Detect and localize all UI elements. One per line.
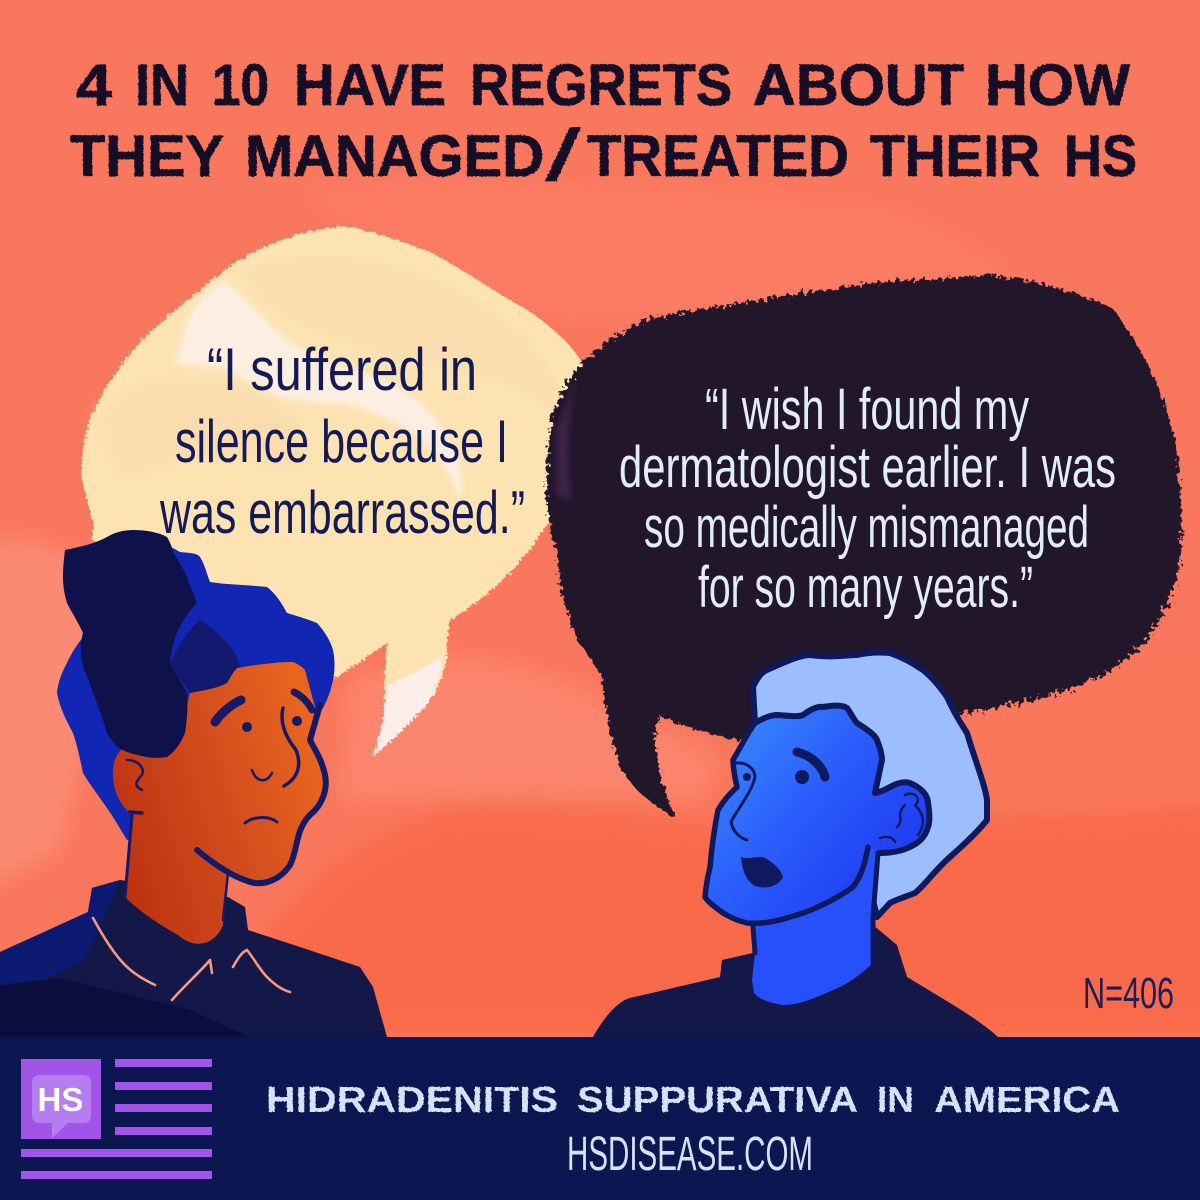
speech bubble: woman [81,226,582,756]
footer band [0,1037,1200,1200]
quote: woman: “I suffered in [207,336,477,403]
woman hair midtone [170,620,240,693]
character: woman [0,530,387,1037]
title [70,53,1137,196]
title: 10 [212,53,269,118]
title: ABOUT [753,53,964,118]
footer url: HSDISEASE.COM [567,1128,813,1181]
man face [705,706,930,923]
quote: man: “I wish I found my [705,377,1029,442]
speech bubble: man [546,275,1181,818]
title: REGRETS [470,53,732,118]
title: HS [1064,124,1137,189]
footer title: SUPPURATIVA [577,1079,858,1120]
title: IN [135,53,189,118]
woman hair bun [63,530,197,758]
HS flag logo: HS [38,1081,84,1118]
woman hair back [57,535,334,840]
quote: woman: silence because I [175,408,508,475]
title: THEY [70,124,224,189]
footer title: IN [877,1079,914,1120]
title: MANAGED [245,124,544,189]
title: 4 [76,53,112,118]
man neck [752,845,878,1005]
HS flag logo [21,1059,212,1179]
quote: woman [159,336,525,546]
character: man [593,652,998,1037]
title: TREATED [587,124,849,189]
title: HOW [985,53,1130,118]
footer title: AMERICA [934,1079,1120,1120]
title: THEIR [870,124,1040,189]
title: / [546,116,580,196]
woman torso [0,880,387,1037]
woman face and neck [113,662,326,944]
man facial lines [705,706,930,963]
man hair [753,652,987,917]
footer title [266,1079,1120,1120]
woman facial lines [125,692,326,920]
quote: man [619,377,1116,620]
quote: woman: was embarrassed.” [159,479,525,546]
quote: man: for so many years.” [698,555,1033,620]
footer title: HIDRADENITIS [266,1079,558,1120]
man torso [593,925,998,1037]
title: HAVE [294,53,446,118]
